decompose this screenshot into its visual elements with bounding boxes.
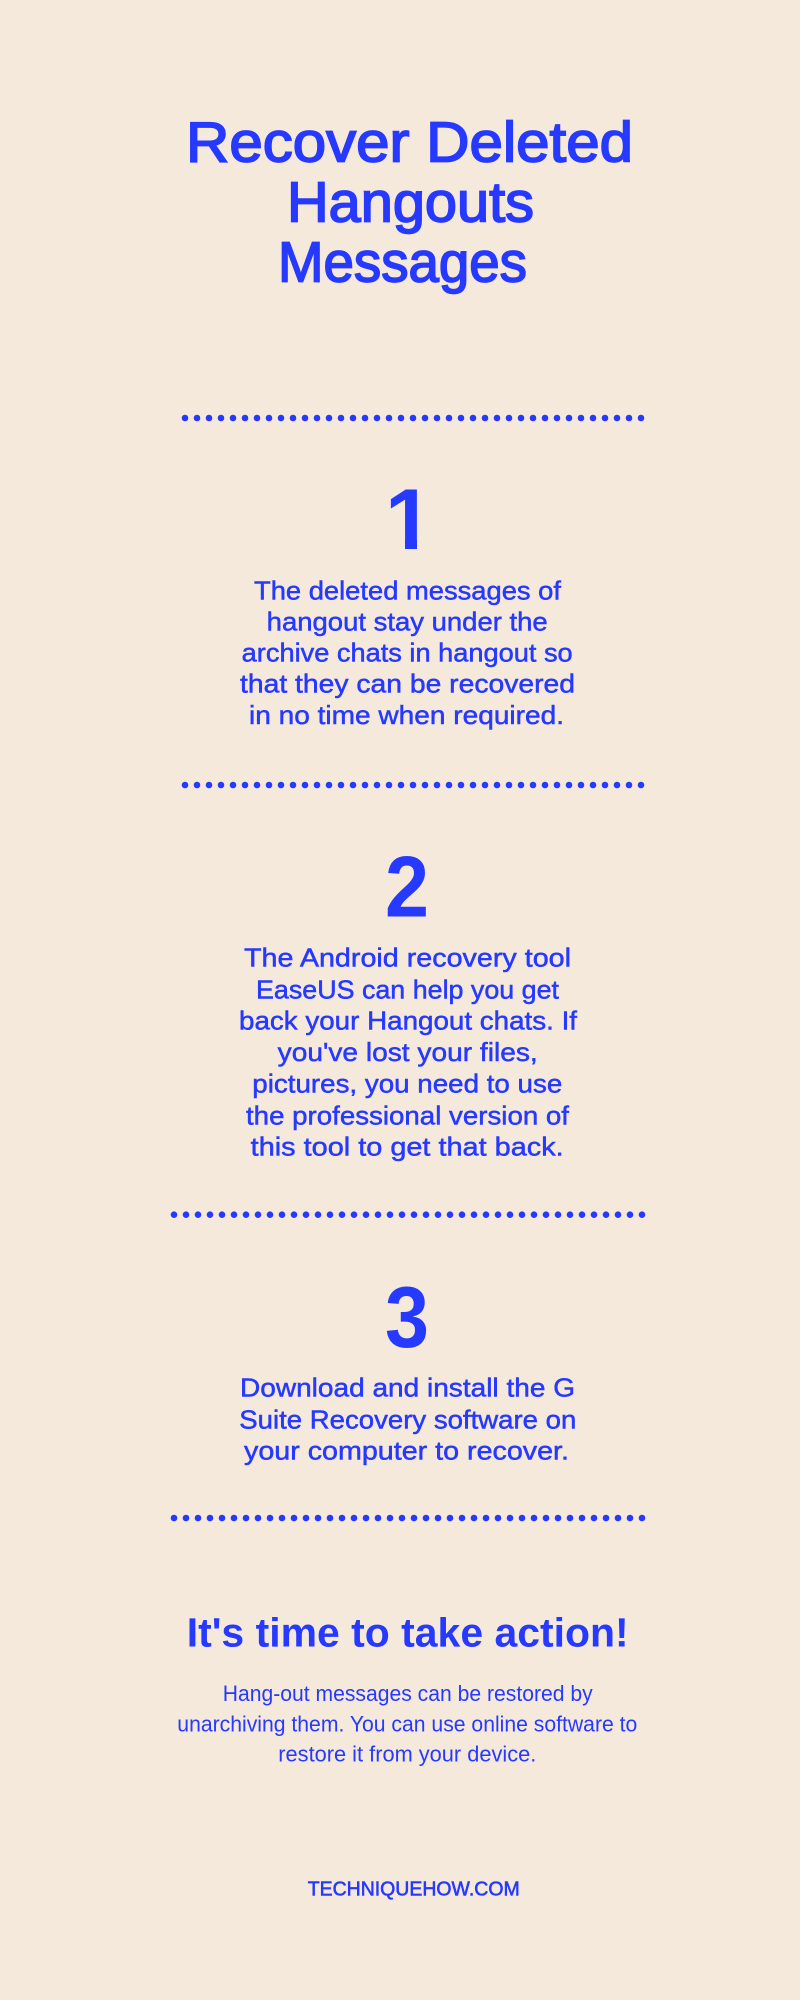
step 2 text	[239, 943, 578, 1161]
panel: step 1	[240, 472, 575, 730]
closing paragraph	[177, 1681, 637, 1767]
step 1 text: in no time when required.	[249, 700, 564, 730]
step 3 text: Suite Recovery software on	[239, 1404, 576, 1434]
step 2 text: EaseUS can help you get	[256, 974, 560, 1004]
step 2 text: pictures, you need to use	[252, 1069, 562, 1099]
step 2 text: you've lost your files,	[278, 1037, 538, 1067]
call to action heading: It's time to take action!	[187, 1610, 629, 1656]
closing paragraph: restore it from your device.	[278, 1742, 536, 1767]
number 1: 1	[385, 472, 433, 568]
step 1 text	[240, 575, 575, 730]
title: Messages	[278, 231, 527, 295]
title: Hangouts	[287, 171, 534, 235]
step 1 text: The deleted messages of	[254, 575, 562, 605]
step 3 text: Download and install the G	[240, 1373, 575, 1403]
number 2: 2	[385, 840, 429, 936]
panel: step 2	[239, 840, 578, 1161]
title	[186, 111, 633, 295]
footer website: TECHNIQUEHOW.COM	[308, 1878, 520, 1901]
panel: step 3	[239, 1270, 576, 1465]
step 3 text: your computer to recover.	[244, 1435, 569, 1465]
step 1 text: archive chats in hangout so	[242, 638, 573, 668]
step 2 text: back your Hangout chats. If	[239, 1005, 578, 1035]
step 2 text: the professional version of	[246, 1100, 570, 1130]
step 2 text: this tool to get that back.	[251, 1131, 564, 1161]
step 3 text	[239, 1373, 576, 1465]
number 3: 3	[385, 1270, 429, 1366]
title: Recover Deleted	[186, 111, 633, 175]
closing paragraph: unarchiving them. You can use online software to	[177, 1711, 637, 1736]
closing paragraph: Hang-out messages can be restored by	[223, 1681, 593, 1706]
step 1 text: that they can be recovered	[240, 669, 575, 699]
step 2 text: The Android recovery tool	[244, 943, 571, 973]
step 1 text: hangout stay under the	[267, 607, 548, 637]
